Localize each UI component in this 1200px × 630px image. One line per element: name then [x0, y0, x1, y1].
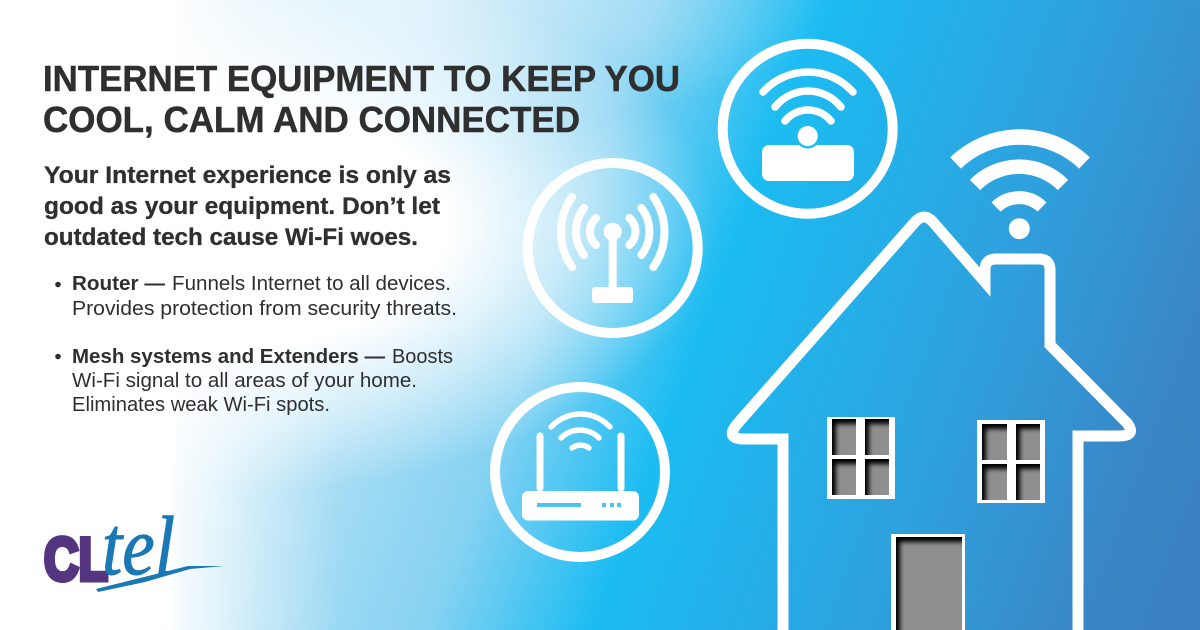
title: [43, 58, 680, 140]
left window: [827, 417, 895, 499]
intro paragraph: [44, 162, 451, 251]
bullet: mesh systems and extenders: Boosts: [392, 345, 453, 368]
CLtel logo: [44, 500, 224, 593]
CLtel logo: tel: [102, 500, 175, 593]
CLtel logo: CL: [44, 526, 108, 593]
bullet: router: Provides protection from security threats.: [72, 297, 457, 320]
door: [891, 534, 965, 630]
house outline: [732, 217, 1131, 630]
bullet: mesh systems and extenders: Eliminates weak Wi-Fi spots.: [72, 393, 330, 416]
intro paragraph: Your Internet experience is only as: [44, 162, 451, 189]
bullet: router: Funnels Internet to all devices.: [172, 272, 451, 295]
icon: wifi signal above chimney: [956, 137, 1084, 239]
title: COOL, CALM AND CONNECTED: [43, 99, 580, 140]
bullet: mesh systems and extenders: [55, 345, 453, 416]
title: INTERNET EQUIPMENT TO KEEP YOU: [43, 58, 680, 99]
bullet: mesh systems and extenders: Wi-Fi signal to all areas of your home.: [72, 369, 417, 392]
icon: dual antenna router in circle: [495, 387, 665, 557]
intro paragraph: outdated tech cause Wi-Fi woes.: [44, 224, 418, 251]
right window: [977, 420, 1045, 503]
icon: wifi gateway in circle: [723, 44, 893, 214]
bullet: mesh systems and extenders: Mesh systems and Extenders —: [72, 345, 385, 368]
icon: wireless tower in circle: [528, 163, 698, 333]
bullet: router: [55, 272, 457, 320]
bullet: router: Router —: [72, 272, 166, 295]
intro paragraph: good as your equipment. Don’t let: [44, 193, 440, 220]
